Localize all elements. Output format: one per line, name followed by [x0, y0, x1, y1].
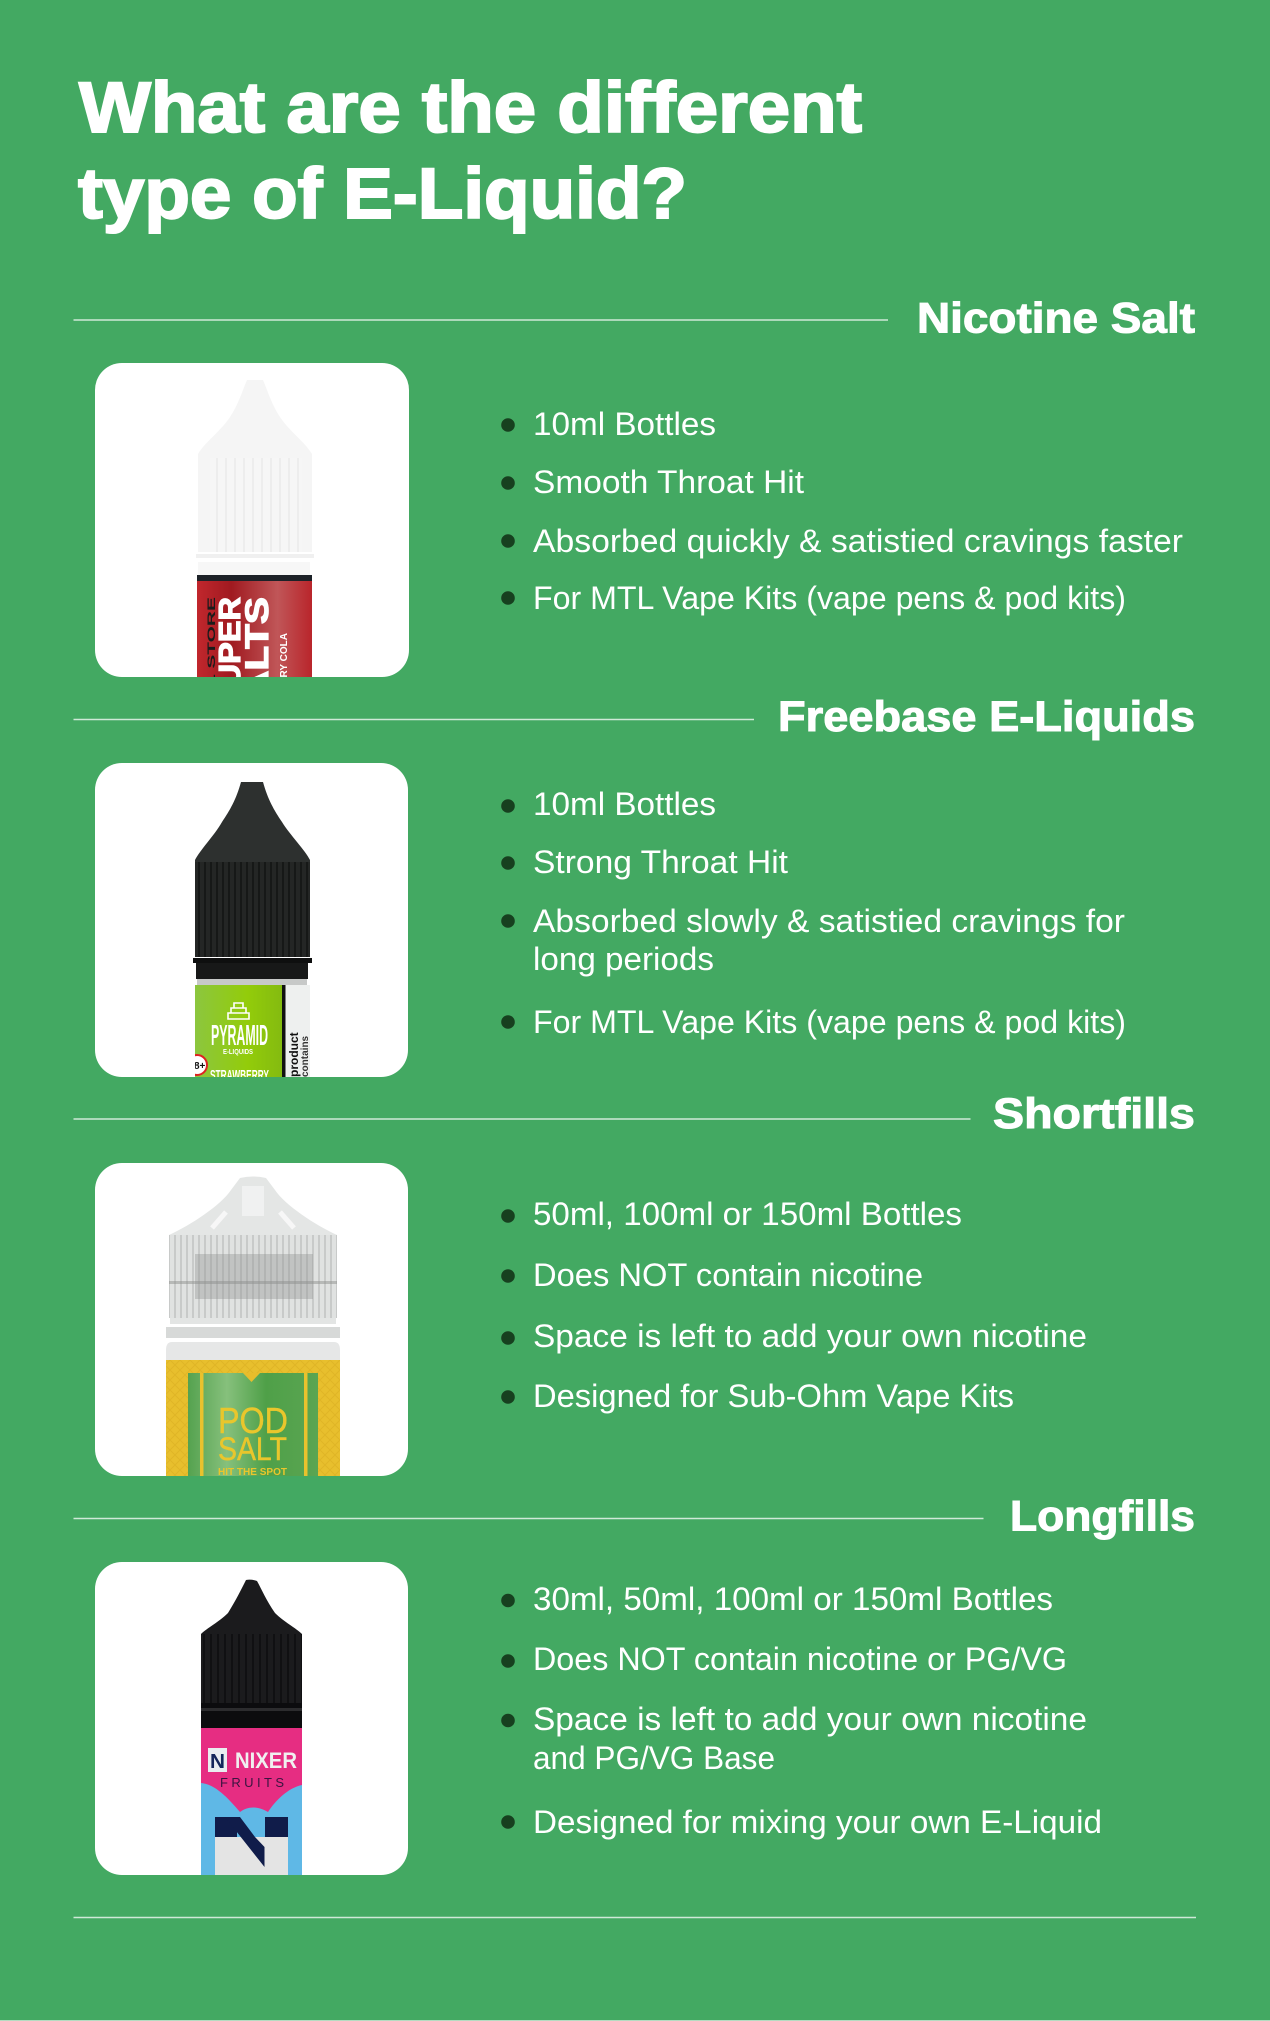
yellow and green label: HIT THE SPOT [218, 1467, 287, 1478]
panel: nicotine salt product image [95, 363, 409, 677]
green label: E-LIQUIDS [223, 1049, 253, 1056]
icon: clear bottle cap [166, 1176, 340, 1361]
title: What are the different [79, 69, 862, 148]
list: longfills features [501, 1581, 1102, 1840]
list: nicotine salt features: 10ml Bottles [533, 406, 716, 442]
list: nicotine salt features [501, 406, 1183, 616]
heading: Shortfills: Shortfills [993, 1091, 1195, 1138]
list: shortfills features: 50ml, 100ml or 150ml Bottles [533, 1196, 962, 1232]
list: freebase features: long periods [533, 941, 714, 977]
list: freebase features: Strong Throat Hit [533, 844, 788, 880]
green label: STRAWBERRY [210, 1067, 269, 1084]
red label: SUPER [212, 597, 247, 709]
title [78, 69, 862, 234]
list: longfills features: and PG/VG Base [533, 1740, 775, 1776]
green label: PYRAMID [211, 1020, 268, 1052]
icon: age badge: 8+ [194, 1061, 206, 1072]
list: shortfills features: Space is left to add your own nicotine [533, 1318, 1087, 1354]
icon: nixer logo [208, 1748, 227, 1772]
red label: CHERRY COLA [279, 633, 290, 706]
panel: shortfills product image [95, 1163, 408, 1478]
list: nicotine salt features: Smooth Throat Hit [533, 464, 804, 500]
title: type of E-Liquid? [78, 155, 687, 234]
heading: Nicotine Salt: Nicotine Salt [917, 296, 1195, 342]
icon: black bottle cap [193, 782, 312, 985]
list: shortfills features [501, 1196, 1087, 1414]
list: longfills features: 30ml, 50ml, 100ml or 150ml Bottles [533, 1581, 1053, 1617]
heading: Freebase E-Liquids: Freebase E-Liquids [778, 694, 1195, 741]
red label: AL STORE [206, 597, 218, 702]
list: nicotine salt features: For MTL Vape Kits (vape pens & pod kits) [533, 580, 1126, 616]
pink label: NIXER [235, 1748, 297, 1773]
pink label [201, 1728, 302, 1875]
list: freebase features: Absorbed slowly & satistied cravings for [533, 903, 1125, 939]
list: shortfills features: Designed for Sub-Ohm Vape Kits [533, 1378, 1014, 1414]
heading: Longfills: Longfills [1010, 1494, 1195, 1540]
yellow and green label: POD [218, 1400, 288, 1441]
list: freebase features [501, 786, 1126, 1040]
icon: white bottle cap [196, 380, 314, 575]
pink label: N [210, 1751, 225, 1773]
list: longfills features: Does NOT contain nicotine or PG/VG [533, 1641, 1067, 1677]
panel: longfills product image [95, 1562, 408, 1875]
pink label: FRUITS [220, 1775, 284, 1790]
red label [197, 575, 312, 677]
green label: contains [300, 1035, 311, 1077]
yellow and green label [166, 1360, 340, 1478]
yellow and green label: SALT [218, 1431, 287, 1467]
list: freebase features: 10ml Bottles [533, 786, 716, 822]
icon: black bottle cap [201, 1580, 302, 1729]
list: longfills features: Space is left to add your own nicotine [533, 1701, 1087, 1737]
green label [195, 985, 310, 1077]
list: freebase features: For MTL Vape Kits (vape pens & pod kits) [533, 1004, 1126, 1040]
green label: product [287, 1032, 301, 1077]
red label: SALTS [239, 597, 275, 727]
panel: freebase product image [95, 763, 408, 1084]
list: nicotine salt features: Absorbed quickly & satistied cravings faster [533, 523, 1183, 559]
list: shortfills features: Does NOT contain nicotine [533, 1257, 923, 1293]
icon: pyramid logo [228, 1003, 249, 1019]
list: longfills features: Designed for mixing your own E-Liquid [533, 1804, 1102, 1840]
